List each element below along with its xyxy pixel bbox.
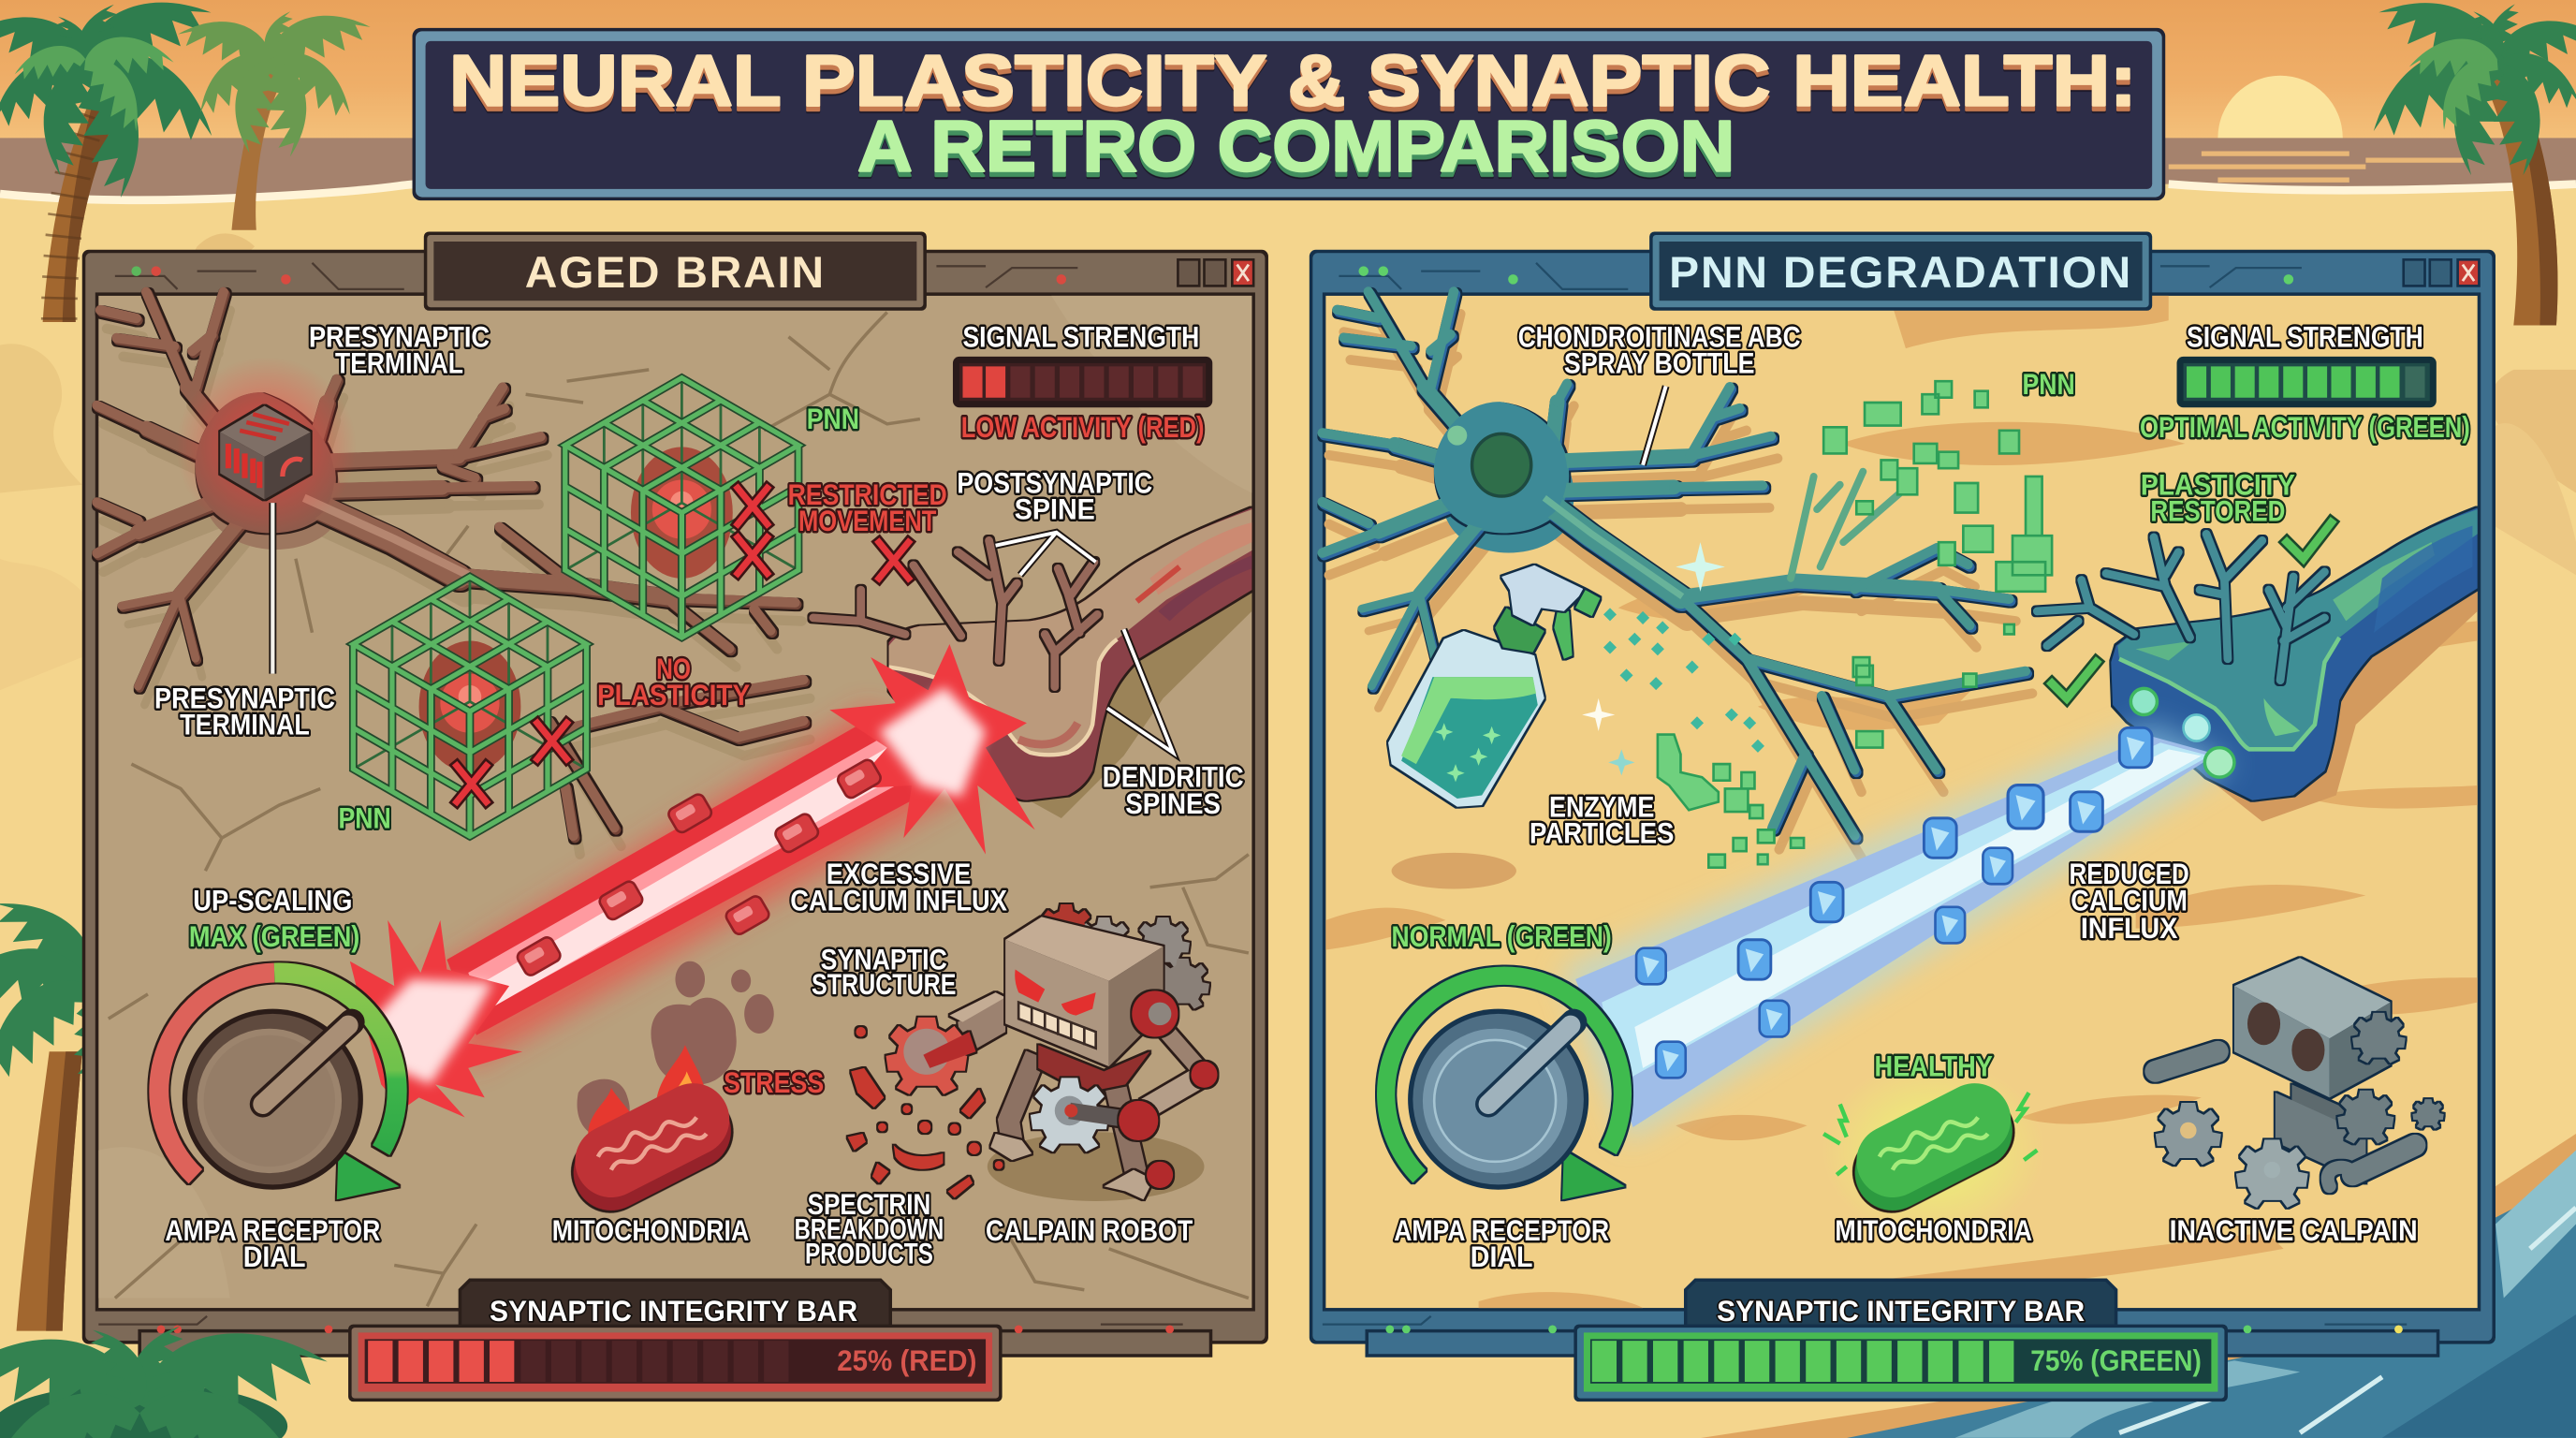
top gears — [1040, 904, 1209, 1009]
label: ampa receptor dial: DIAL — [243, 1240, 305, 1273]
label: excessive calcium influx: EXCESSIVE — [827, 857, 971, 890]
label: restricted movement: MOVEMENT — [798, 504, 936, 537]
left arm — [949, 992, 1005, 1057]
label: plasticity restored — [2141, 467, 2295, 527]
label: ampa receptor dial: AMPA RECEPTOR — [165, 1213, 380, 1247]
sand patch — [1392, 853, 1516, 889]
window frame — [82, 250, 1268, 1344]
label: no plasticity: PLASTICITY — [597, 678, 750, 712]
label: dendritic spines: DENDRITIC — [1103, 760, 1244, 794]
calcium ion blocks — [597, 757, 883, 936]
label: postsynaptic spine: POSTSYNAPTIC — [957, 466, 1152, 500]
label: chondroitinase abc spray bottle: SPRAY BOTTLE — [1564, 345, 1754, 379]
collar — [1495, 608, 1544, 653]
label: enzyme particles — [1530, 789, 1674, 849]
postsynaptic dendrite — [813, 507, 1251, 818]
icon: presynaptic terminal cube — [176, 357, 357, 537]
label: PNN upper: PNN — [807, 402, 859, 435]
label: enzyme particles: ENZYME — [1549, 789, 1654, 823]
heading tab: aged brain — [424, 231, 927, 311]
label: ampa receptor dial: AMPA RECEPTOR — [1394, 1213, 1609, 1247]
value: 25% (RED) — [837, 1343, 976, 1377]
label: restricted movement — [788, 477, 947, 537]
label: ampa receptor dial — [165, 1213, 380, 1273]
joints — [1119, 990, 1218, 1188]
label: no plasticity — [597, 652, 750, 712]
upper surface — [889, 509, 1251, 755]
signal strength meter: pnn — [2177, 357, 2437, 407]
title banner — [413, 28, 2165, 200]
calcium ions blue — [1636, 688, 2234, 1078]
label: presynaptic terminal lower: PRESYNAPTIC — [154, 681, 335, 714]
lit cells — [368, 1341, 514, 1382]
label: excessive calcium influx — [790, 857, 1007, 917]
label: excessive calcium influx: CALCIUM INFLUX — [790, 883, 1007, 917]
icon: red X marks — [457, 488, 909, 801]
palm tree: lower left — [0, 875, 121, 1331]
heading tab: pnn degradation — [1649, 231, 2152, 311]
label: synaptic structure — [812, 943, 956, 1001]
leader lines: spines — [996, 533, 1173, 753]
label: restricted movement: RESTRICTED — [788, 477, 947, 511]
label: stress: STRESS — [724, 1065, 824, 1099]
ampa receptor dial — [159, 973, 399, 1199]
neck — [1038, 1045, 1150, 1093]
spray head — [1501, 565, 1586, 624]
label: signal strength: SIGNAL STRENGTH — [2187, 319, 2423, 353]
label: ampa receptor dial — [1394, 1213, 1609, 1273]
heading tab: aged brain: AGED BRAIN — [525, 248, 826, 298]
saw left — [886, 1018, 976, 1094]
leader line: spray bottle — [1643, 386, 1666, 465]
window buttons: aged — [1178, 259, 1253, 286]
label: spectrin breakdown products: PRODUCTS — [805, 1237, 933, 1270]
burst: near spine — [829, 644, 1035, 855]
title line 2: A RETRO COMPARISON — [857, 107, 1734, 187]
label: ampa receptor dial: DIAL — [1471, 1240, 1533, 1273]
spines — [2037, 534, 2324, 681]
label: presynaptic terminal top: PRESYNAPTIC — [309, 319, 490, 353]
feet — [990, 1134, 1153, 1199]
icon: spray bottle — [1388, 565, 1600, 807]
label: plasticity restored: RESTORED — [2150, 493, 2285, 527]
label: postsynaptic spine — [957, 466, 1152, 526]
icon: check marks — [2052, 522, 2331, 698]
label: PNN lower: PNN — [339, 801, 391, 835]
sand dunes — [1325, 296, 2478, 1308]
sea band — [0, 138, 2576, 200]
palm tree: right — [2356, 0, 2576, 326]
label: inactive calpain: INACTIVE CALPAIN — [2170, 1213, 2418, 1247]
signal strength meter: aged — [953, 357, 1212, 407]
caption: SYNAPTIC INTEGRITY BAR — [490, 1294, 857, 1328]
synaptic integrity bar: aged — [348, 1280, 1003, 1401]
label: healthy: HEALTHY — [1875, 1049, 1993, 1083]
burst: near dial — [350, 920, 522, 1117]
presynaptic neuron — [97, 292, 810, 855]
postsynaptic dendrite — [2037, 507, 2478, 822]
wet sand and ocean — [1701, 1134, 2576, 1438]
teal neuron — [1323, 292, 2032, 858]
synaptic integrity bar: pnn — [1573, 1280, 2228, 1401]
label: presynaptic terminal lower: TERMINAL — [180, 708, 310, 741]
spines — [813, 540, 1097, 687]
cast shadow — [2206, 588, 2478, 822]
label: up-scaling: UP-SCALING — [193, 883, 352, 917]
label: presynaptic terminal top: TERMINAL — [335, 345, 463, 379]
panel interior — [95, 292, 1255, 1312]
label: reduced calcium influx: CALCIUM — [2071, 883, 2188, 917]
light twigs — [1791, 472, 1906, 579]
degraded PNN fragments — [1658, 381, 2052, 868]
label: chondroitinase abc spray bottle — [1518, 319, 1801, 379]
spray particles — [1582, 542, 1764, 775]
label: presynaptic terminal lower — [154, 681, 335, 741]
mitochondria healthy — [1822, 1060, 2045, 1240]
perineuronal net cage lower — [353, 577, 587, 836]
leader line: presynaptic — [271, 503, 275, 674]
label: presynaptic terminal top — [309, 319, 490, 379]
lit cells — [1592, 1341, 2013, 1382]
label: enzyme particles: PARTICLES — [1530, 815, 1674, 849]
window frame — [1310, 250, 2496, 1344]
trigger — [1554, 611, 1573, 659]
label: dendritic spines: SPINES — [1125, 786, 1221, 820]
heading tab: pnn degradation: PNN DEGRADATION — [1669, 248, 2132, 298]
label: calpain robot: CALPAIN ROBOT — [986, 1213, 1193, 1247]
head — [1005, 917, 1164, 1066]
liquid — [1401, 677, 1538, 799]
label: synaptic structure: STRUCTURE — [812, 967, 956, 1001]
value: 75% (GREEN) — [2030, 1343, 2202, 1377]
label: spectrin breakdown products: SPECTRIN — [808, 1187, 930, 1221]
window buttons: pnn — [2404, 259, 2479, 286]
spectrin debris — [848, 1027, 1003, 1197]
label: chondroitinase abc spray bottle: CHONDROITINASE ABC — [1518, 319, 1801, 353]
robot gears — [2156, 1013, 2444, 1208]
robot head — [2234, 958, 2391, 1097]
legs — [1009, 1064, 1135, 1170]
neuron nucleus — [1472, 433, 1531, 496]
label: no plasticity: NO — [656, 652, 691, 685]
inactive calpain robot — [2156, 958, 2444, 1208]
label: reduced calcium influx: INFLUX — [2081, 911, 2177, 945]
label: mitochondria: MITOCHONDRIA — [552, 1213, 749, 1247]
body — [561, 1080, 744, 1224]
palm tree: bottom left foreground — [0, 1300, 334, 1438]
palm tree: left large — [0, 0, 230, 322]
ground cracks — [109, 312, 1249, 1306]
label: dendritic spines — [1103, 760, 1244, 820]
label: spectrin breakdown products — [795, 1187, 944, 1270]
calpain robot — [848, 904, 1218, 1201]
label: plasticity restored: PLASTICITY — [2141, 467, 2295, 501]
label: spectrin breakdown products: BREAKDOWN — [795, 1211, 944, 1245]
label: synaptic structure: SYNAPTIC — [821, 943, 947, 976]
calcium ions — [515, 935, 563, 977]
nozzle — [1575, 590, 1600, 616]
upper surface — [2117, 509, 2478, 749]
title line 1: NEURAL PLASTICITY & SYNAPTIC HEALTH: — [449, 40, 2137, 121]
label: mitochondria: MITOCHONDRIA — [1835, 1213, 2032, 1247]
robot body — [2276, 1084, 2365, 1183]
body — [1388, 631, 1544, 807]
flames — [588, 1045, 708, 1151]
ground shadow — [988, 1132, 1204, 1201]
dendrite body — [889, 507, 1251, 800]
sun — [2217, 76, 2343, 200]
dendrite body — [2111, 507, 2478, 800]
right arm — [1145, 1022, 1204, 1109]
cast shadow — [1003, 592, 1251, 818]
label: reduced calcium influx: REDUCED — [2070, 857, 2189, 890]
loose arm and wrench — [2156, 1051, 2415, 1186]
label: optimal activity: OPTIMAL ACTIVITY (GREEN) — [2140, 410, 2470, 444]
panel interior — [1323, 292, 2481, 1312]
label: max green: MAX (GREEN) — [189, 919, 359, 953]
ampa receptor dial — [1386, 976, 1625, 1199]
red beam: excessive calcium influx — [350, 644, 1035, 1117]
label: PNN: PNN — [2023, 367, 2075, 401]
smoke — [578, 961, 774, 1136]
palm tree: left small — [174, 0, 374, 230]
perineuronal net cage upper — [565, 378, 798, 638]
blue beam: reduced calcium influx — [1560, 723, 2234, 1142]
label: postsynaptic spine: SPINE — [1015, 492, 1095, 526]
label: low activity: LOW ACTIVITY (RED) — [961, 410, 1204, 444]
caption: SYNAPTIC INTEGRITY BAR — [1717, 1294, 2085, 1328]
label: reduced calcium influx — [2070, 857, 2189, 945]
label: normal green: NORMAL (GREEN) — [1392, 919, 1612, 953]
mitochondria stressed — [561, 961, 774, 1224]
saw lower — [1031, 1078, 1137, 1152]
label: signal strength: SIGNAL STRENGTH — [962, 319, 1199, 353]
